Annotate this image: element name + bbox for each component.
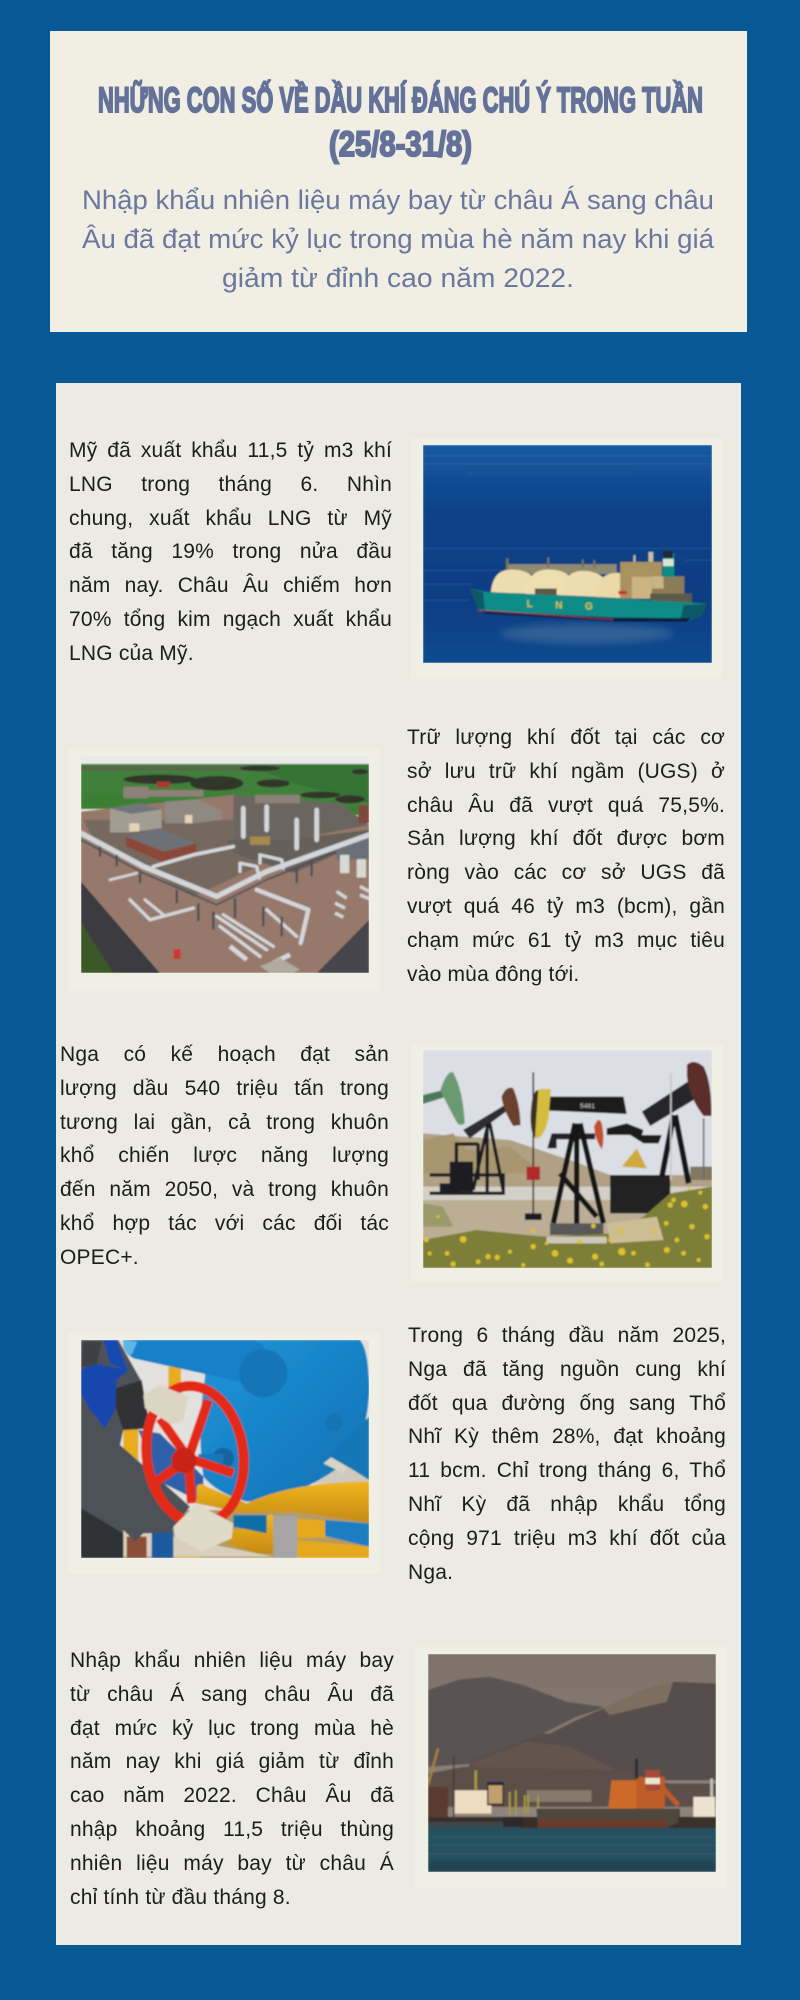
text block 3: OPEC+.	[60, 1246, 139, 1269]
subtitle	[82, 185, 715, 293]
text block 4: Trong 6 tháng đầu năm 2025,	[408, 1324, 726, 1347]
text block 2	[407, 726, 725, 986]
subtitle: Nhập khẩu nhiên liệu máy bay từ châu Á sang châu	[82, 185, 714, 215]
text block 1	[69, 439, 392, 665]
text block 3: khổ chiến lược năng lượng	[60, 1144, 389, 1167]
text block 2: ròng vào các cơ sở UGS đã	[407, 861, 725, 884]
text block 5: chỉ tính từ đầu tháng 8.	[70, 1886, 291, 1909]
pumps	[423, 1088, 450, 1104]
text block 1: Mỹ đã xuất khẩu 11,5 tỷ m3 khí	[69, 439, 392, 462]
photo: LNG tanker at sea	[423, 445, 712, 663]
text block 5: nhập khoảng 11,5 triệu thùng	[70, 1818, 394, 1841]
text block 3: khổ hợp tác với các đối tác	[60, 1212, 389, 1235]
worker	[81, 1340, 190, 1558]
yellow pipes	[197, 1482, 369, 1523]
title card	[50, 31, 747, 332]
text block 5: nhiên liệu máy bay từ châu Á	[70, 1852, 394, 1875]
text block 2: vượt quá 46 tỷ m3 (bcm), gần	[407, 895, 725, 918]
text block 1: năm nay. Châu Âu chiếm hơn	[69, 574, 392, 597]
text block 5: đạt mức kỷ lục trong mùa hè	[70, 1717, 394, 1740]
text block 5: năm nay khi giá giảm từ đỉnh	[70, 1750, 394, 1773]
heading	[98, 79, 703, 164]
text block 2: chạm mức 61 tỷ m3 mục tiêu	[407, 929, 725, 952]
vegetation	[423, 1187, 712, 1268]
text block 1: LNG của Mỹ.	[69, 642, 194, 665]
text block 4: Nhĩ Kỳ thêm 28%, đạt khoảng	[408, 1425, 726, 1448]
photo: LNG tanker at sea: G	[585, 602, 593, 613]
text block 2: vào mùa đông tới.	[407, 963, 579, 986]
text block 5: Nhập khẩu nhiên liệu máy bay	[70, 1649, 394, 1672]
text block 3	[60, 1043, 389, 1269]
heading: (25/8-31/8)	[329, 125, 472, 164]
text block 1: LNG trong tháng 6. Nhìn	[69, 473, 392, 496]
text block 1: 70% tổng kim ngạch xuất khẩu	[69, 608, 392, 631]
text block 5: cao năm 2022. Châu Âu đã	[70, 1784, 394, 1807]
photo frame: port and mountains	[415, 1647, 727, 1888]
text block 4	[408, 1324, 726, 1584]
photo: worker turning red valve	[81, 1340, 369, 1558]
text block 5	[70, 1649, 394, 1909]
text block 2: sở lưu trữ khí ngầm (UGS) ở	[407, 760, 725, 783]
text block 1: chung, xuất khẩu LNG từ Mỹ	[69, 507, 392, 530]
text block 4: cộng 971 triệu m3 khí đốt của	[408, 1527, 726, 1550]
text block 4: Nga đã tăng nguồn cung khí	[408, 1358, 726, 1381]
text block 3: lượng dầu 540 triệu tấn trong	[60, 1077, 389, 1100]
photo frame: LNG tanker	[411, 438, 723, 679]
photo frame: valve wheel	[68, 1333, 380, 1574]
subtitle: Âu đã đạt mức kỷ lục trong mùa hè năm nay khi giá	[82, 223, 715, 254]
text block 5: từ châu Á sang châu Âu đã	[70, 1683, 394, 1706]
text block 4: đốt qua đường ống sang Thổ	[408, 1392, 726, 1415]
text block 3: Nga có kế hoạch đạt sản	[60, 1043, 389, 1066]
photo frame: gas storage facility	[68, 749, 380, 991]
text block 2: Sản lượng khí đốt được bơm	[407, 827, 725, 850]
photo: pump jacks with yellow flowers: 5481	[580, 1103, 595, 1110]
text block 4: 11 bcm. Chỉ trong tháng 6, Thổ	[408, 1459, 726, 1482]
gloves	[143, 1385, 188, 1425]
text block 3: tương lai gần, cả trong khuôn	[60, 1111, 389, 1134]
ships	[455, 1790, 491, 1814]
text block 2: châu Âu đã vượt quá 75,5%.	[407, 794, 725, 817]
photo: underground gas storage site	[81, 762, 369, 973]
text block 1: đã tăng 19% trong nửa đầu	[69, 540, 392, 563]
pipes	[81, 807, 369, 956]
text block 4: Nhĩ Kỳ đã nhập khẩu tổng	[408, 1493, 726, 1516]
photo: LNG tanker at sea: N	[555, 601, 563, 612]
wheel	[137, 1380, 253, 1530]
text block 4: Nga.	[408, 1561, 453, 1584]
photo: tankers at port below mountains	[428, 1654, 716, 1872]
photo: pump jacks with yellow flowers	[423, 1050, 712, 1268]
photo: LNG tanker at sea: L	[527, 599, 533, 610]
main panel	[56, 383, 741, 1945]
photo frame: oil pump jacks	[411, 1043, 723, 1282]
text block 3: đến năm 2050, và trong khuôn	[60, 1178, 389, 1201]
buildings	[110, 803, 162, 833]
blue disc	[200, 1340, 369, 1502]
subtitle: giảm từ đỉnh cao năm 2022.	[222, 263, 574, 293]
text block 2: Trữ lượng khí đốt tại các cơ	[407, 726, 725, 749]
